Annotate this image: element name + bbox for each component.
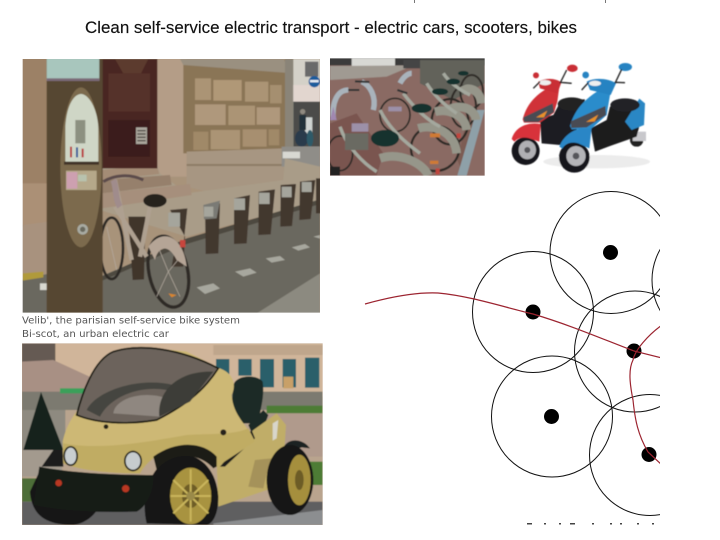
- title: Clean self-service electric transport - electric cars, scooters, bikes: [85, 18, 577, 37]
- station dots: [526, 245, 656, 462]
- photo: red and blue scooters: [512, 63, 650, 173]
- clipped footnote at bottom of diagram: [527, 523, 654, 524]
- coverage diagram: stations and routes: [364, 191, 660, 516]
- photo: Velib bike station: [20, 57, 323, 317]
- red route lines: [365, 293, 662, 465]
- photo: Bi-scot electric car: [20, 342, 325, 527]
- photo: row of Velib bikes: [327, 57, 487, 177]
- caption: Bi-scot: Bi-scot, an urban electric car: [22, 329, 170, 340]
- caption: Velib: Velib', the parisian self-service bike system: [22, 316, 240, 326]
- clipped marks at top edge: [414, 0, 606, 3]
- coverage circles: [472, 191, 660, 516]
